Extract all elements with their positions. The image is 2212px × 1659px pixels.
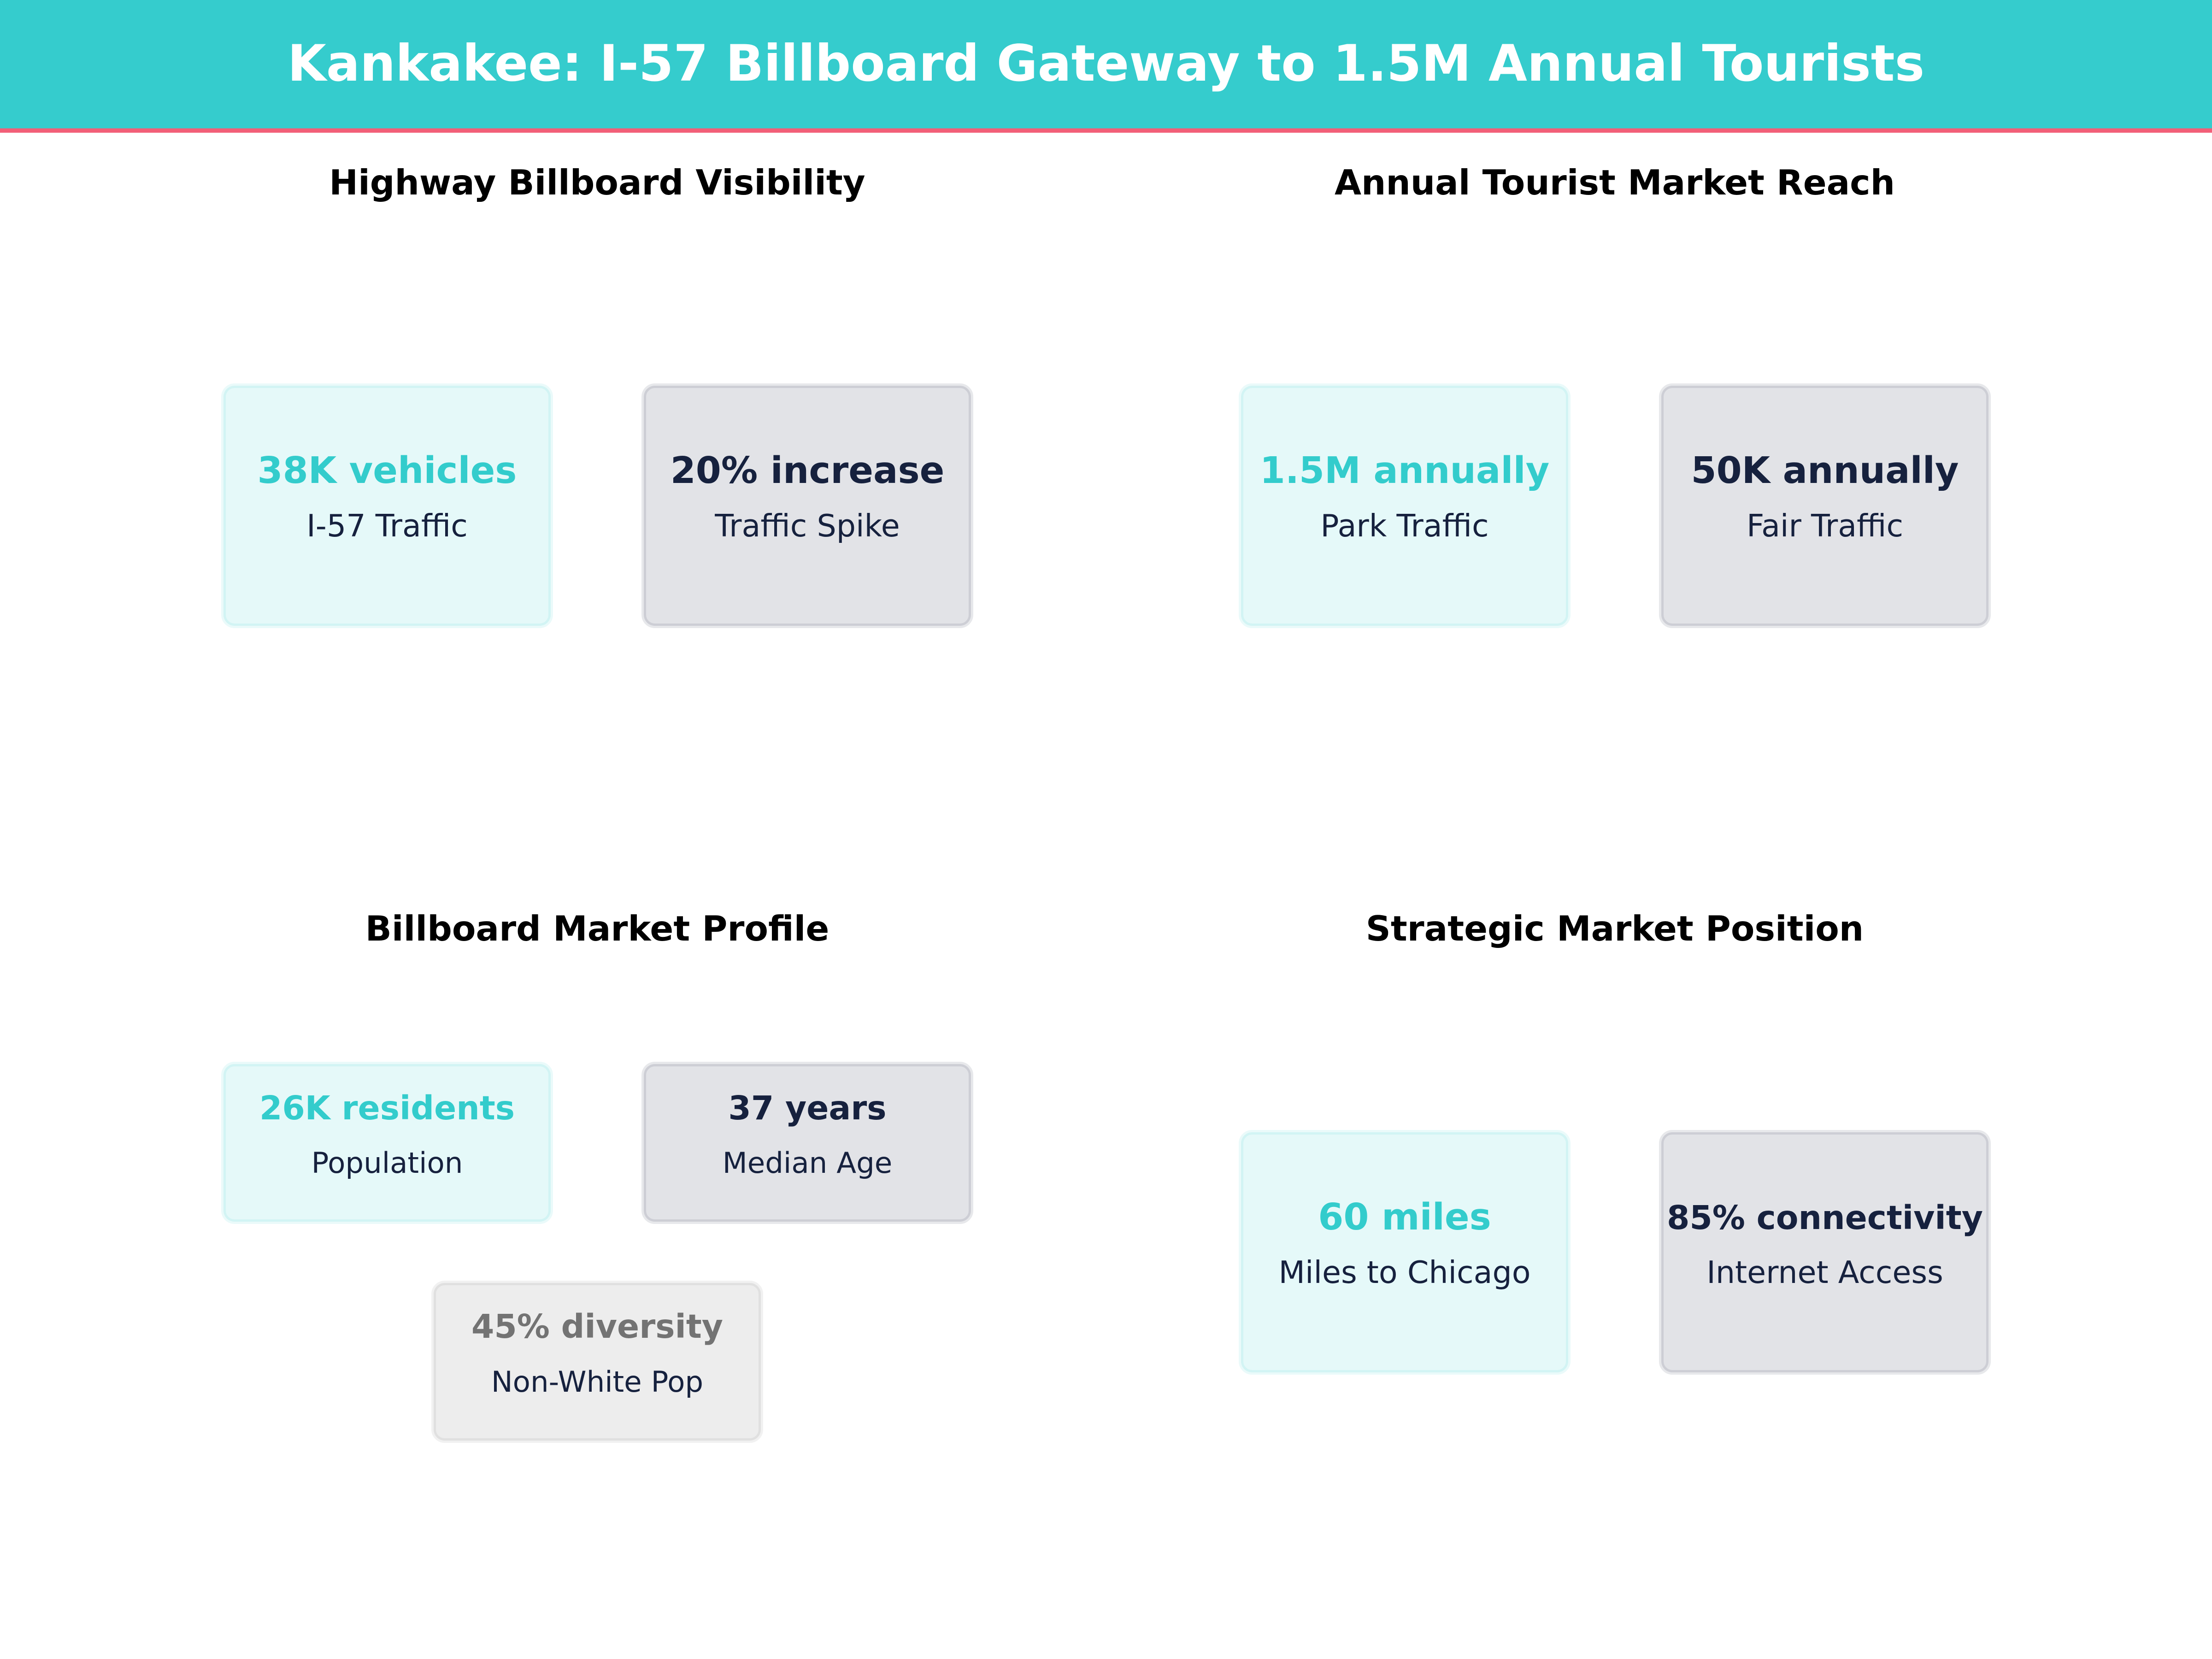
card: non-white population: 45% diversity bbox=[471, 1307, 723, 1346]
card: internet access bbox=[1661, 1132, 1988, 1372]
card: median age bbox=[644, 1064, 971, 1222]
panel: strategic market position bbox=[1241, 908, 1988, 1372]
heading: Highway Billboard Visibility bbox=[329, 162, 865, 203]
card: fair traffic bbox=[1661, 386, 1988, 626]
card: median age: 37 years bbox=[728, 1089, 887, 1127]
card: population bbox=[224, 1064, 551, 1222]
panel: billboard market profile bbox=[224, 908, 971, 1441]
heading: Strategic Market Position bbox=[1366, 908, 1864, 949]
card: miles to Chicago: 60 miles bbox=[1318, 1195, 1491, 1238]
card: miles to Chicago: Miles to Chicago bbox=[1279, 1254, 1530, 1290]
card: traffic spike bbox=[644, 386, 971, 626]
card: traffic spike: 20% increase bbox=[671, 449, 944, 492]
card: fair traffic: Fair Traffic bbox=[1747, 508, 1903, 544]
card: park traffic bbox=[1241, 386, 1568, 626]
card: internet access: Internet Access bbox=[1706, 1254, 1943, 1290]
heading: Billboard Market Profile bbox=[365, 908, 829, 949]
card: internet access: 85% connectivity bbox=[1667, 1199, 1983, 1237]
title banner bbox=[0, 0, 2212, 133]
card: population: Population bbox=[312, 1146, 463, 1180]
card: I-57 traffic: 38K vehicles bbox=[258, 449, 517, 492]
heading: Annual Tourist Market Reach bbox=[1335, 162, 1895, 203]
card: park traffic: Park Traffic bbox=[1320, 508, 1489, 544]
card: fair traffic: 50K annually bbox=[1691, 449, 1959, 492]
card: non-white population bbox=[434, 1283, 761, 1441]
card: median age: Median Age bbox=[723, 1146, 892, 1180]
card: population: 26K residents bbox=[259, 1089, 515, 1127]
card: park traffic: 1.5M annually bbox=[1260, 449, 1549, 492]
panel: highway billboard visibility bbox=[224, 162, 971, 626]
card: I-57 traffic: I-57 Traffic bbox=[306, 508, 468, 544]
card: non-white population: Non-White Pop bbox=[491, 1365, 703, 1399]
card: traffic spike: Traffic Spike bbox=[714, 508, 900, 544]
card: I-57 traffic bbox=[224, 386, 551, 626]
title: Kankakee: I-57 Billboard Gateway to 1.5M Annual Tourists bbox=[288, 34, 1924, 93]
card: miles to Chicago bbox=[1241, 1132, 1568, 1372]
panel: annual tourist market reach bbox=[1241, 162, 1988, 626]
